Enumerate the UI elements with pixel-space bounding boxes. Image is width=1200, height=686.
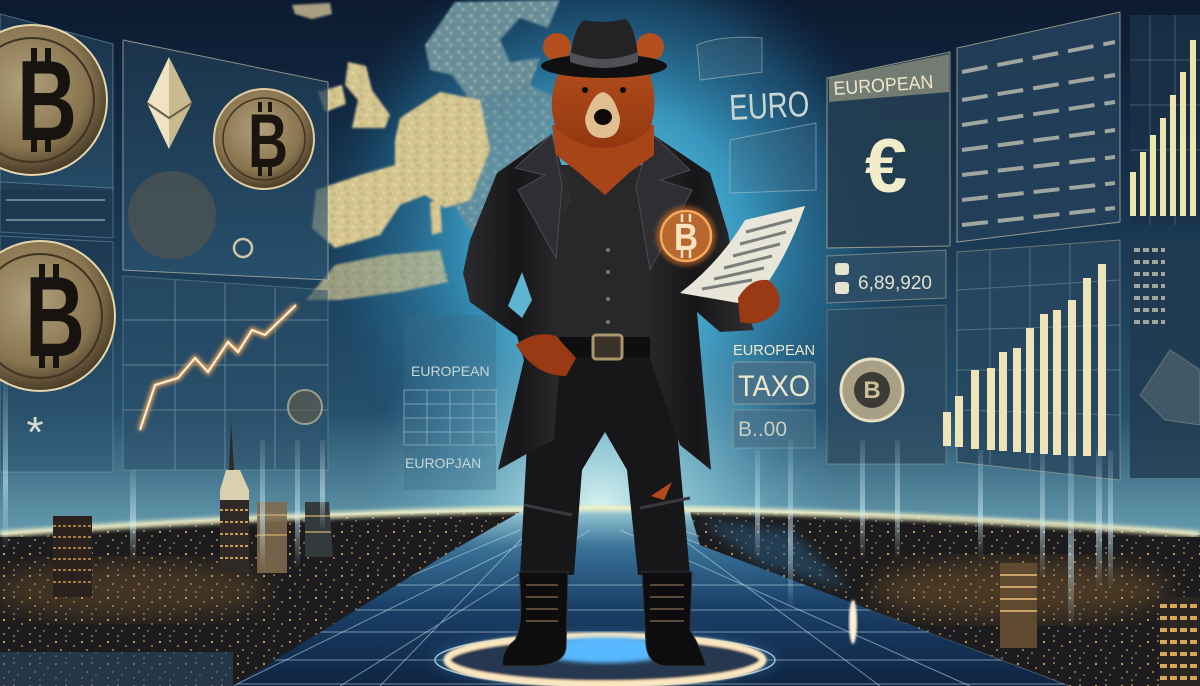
- panel: european small labels: EUROPJAN: [405, 455, 481, 471]
- panel: european taxo: EUROPEAN: [733, 342, 815, 359]
- building: bottom right tower: [1160, 597, 1200, 686]
- building: left tower: [53, 516, 92, 597]
- chest fur: [552, 125, 654, 195]
- icon: faded coin: [128, 171, 216, 259]
- head: [543, 33, 664, 148]
- panel: lower-left bitcoin: B: [25, 254, 85, 381]
- panel: european euro: €: [865, 124, 907, 209]
- document: [680, 206, 805, 303]
- chart: line trend: [123, 276, 328, 470]
- icon: ethereum diamond: [147, 57, 192, 149]
- belt: [556, 335, 652, 359]
- panel: right finance screens: [697, 12, 1200, 480]
- chart: top-right bars: [1130, 15, 1200, 225]
- icon: glowing bitcoin badge: [656, 206, 716, 266]
- panel: lower-left bitcoin: *: [26, 408, 44, 457]
- horizon glow: [0, 508, 1200, 534]
- panel: coin screen: [827, 305, 946, 464]
- coat: [463, 134, 754, 470]
- floor grid: [0, 525, 1200, 686]
- icon: right boot: [642, 572, 706, 666]
- chart: bottom bars: [947, 240, 1120, 480]
- building: mid towers: [257, 502, 333, 573]
- building: right gold block: [1000, 563, 1037, 648]
- muzzle: [585, 92, 620, 138]
- city skyline: [53, 420, 1200, 686]
- panel: top table: [957, 12, 1120, 242]
- panel: value readout: 6,89,920: [858, 273, 932, 294]
- building: spire tower: [220, 420, 249, 573]
- vertical light beams: [3, 380, 1113, 630]
- panel: european taxo: [733, 342, 815, 448]
- panel: ethereum and coin: [123, 40, 328, 280]
- panel: top-left bitcoin: [0, 14, 113, 190]
- icon: left boot: [502, 572, 568, 666]
- panel: european taxo: B..00: [738, 418, 787, 441]
- panel: small data strip: [0, 182, 113, 238]
- glowing platform: [433, 632, 777, 686]
- panel: left crypto screens: [0, 14, 496, 490]
- city lights left: [0, 512, 520, 686]
- icon: glowing bitcoin badge: B: [674, 217, 698, 259]
- icon: bitcoin coin: B: [248, 99, 288, 184]
- floor: [0, 508, 1200, 686]
- icon: bitcoin coin: [214, 89, 314, 189]
- panel: european euro: EUROPEAN: [833, 72, 934, 100]
- panel: european euro: [827, 52, 950, 248]
- label: euro: EURO: [728, 83, 810, 128]
- legs: [520, 350, 690, 575]
- bear character: [463, 19, 805, 666]
- shirt: [552, 165, 655, 345]
- panel: far right screen: [1130, 238, 1200, 478]
- lens flare on floor: [849, 600, 857, 644]
- panel: european taxo: TAXO: [738, 370, 810, 403]
- left paw: [516, 334, 576, 376]
- panel: lower-left bitcoin: [0, 236, 115, 472]
- icon: small ring: [234, 239, 252, 257]
- right paw: [738, 280, 780, 324]
- panel: european small labels: EUROPEAN: [411, 363, 490, 379]
- panel: faded thumbnails: [697, 37, 816, 193]
- city lights right: [690, 512, 1200, 686]
- panel: value readout: [827, 250, 946, 303]
- europe map: [292, 0, 560, 300]
- panel: top-left bitcoin: B: [17, 38, 77, 165]
- panel: coin screen: B: [863, 377, 881, 404]
- black fedora hat: [541, 19, 667, 78]
- panel: european small labels: [404, 315, 496, 490]
